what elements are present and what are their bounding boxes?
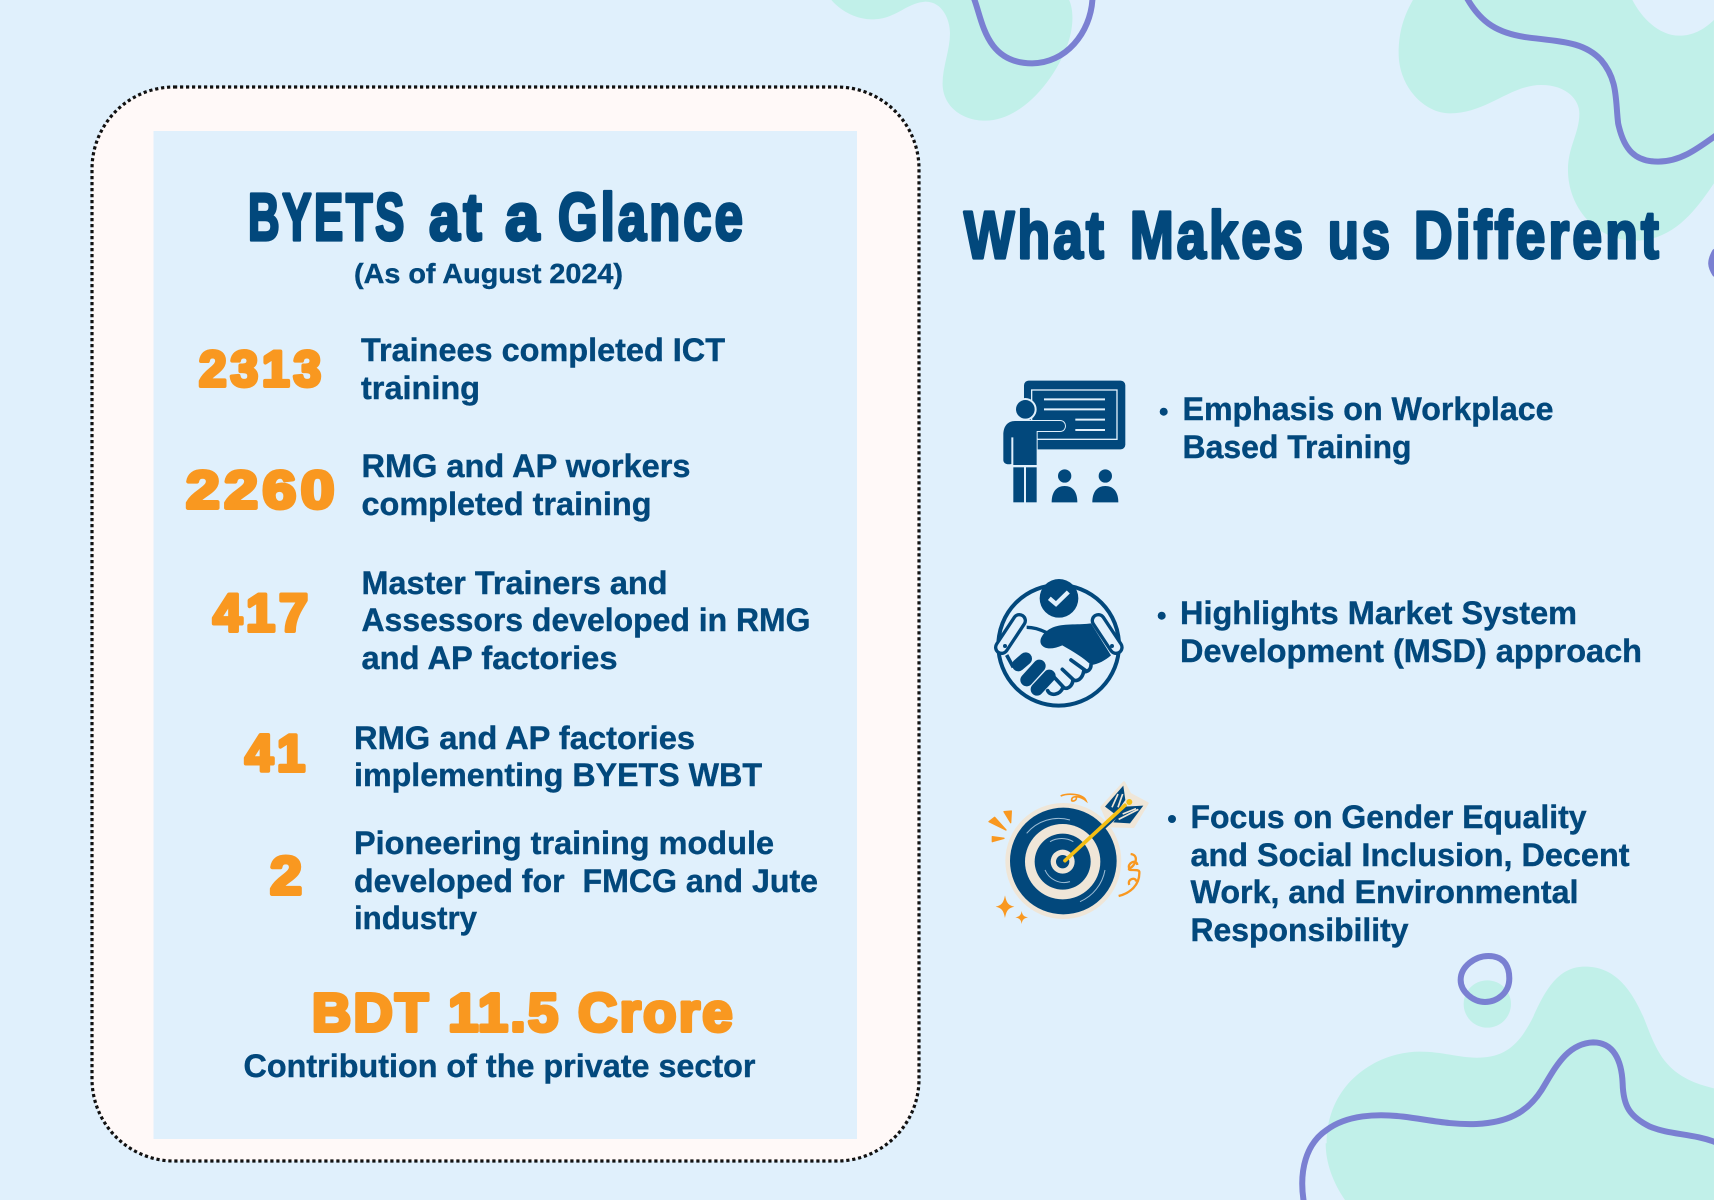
stat: BDT 11.5 Crore private sector contribution — [244, 983, 756, 1084]
stat: 417 master trainers — [213, 565, 810, 676]
stat: BDT 11.5 Crore private sector contribution: Contribution of the private sector — [244, 1048, 756, 1084]
stat: 2313 trainees — [199, 332, 725, 406]
stat: 41 factories: 41 — [245, 725, 309, 783]
stat: 2313 trainees: Trainees completed ICT — [361, 332, 725, 368]
stat: 417 master trainers: 417 — [213, 584, 312, 643]
stat: 2 pioneering modules: Pioneering training module — [354, 825, 774, 861]
icon: target with arrow — [989, 783, 1147, 924]
bullet text: and Social Inclusion, Decent — [1190, 837, 1630, 873]
panel frame: dotted rounded card — [92, 87, 919, 1161]
stat: 2260 workers: completed training — [362, 486, 652, 522]
bullet text: Focus on Gender Equality — [1190, 799, 1587, 835]
heading: BYETS at a Glance: a — [505, 180, 543, 255]
decoration: bottom right blob, ring and wavy line — [1302, 956, 1714, 1200]
bullet text — [1158, 595, 1642, 669]
icon: presenter at board with audience — [1003, 381, 1125, 502]
stat: 2 pioneering modules — [270, 825, 818, 936]
stat: 2260 workers: 2260 — [186, 461, 339, 520]
heading: What Makes us Different: Makes — [1130, 198, 1306, 273]
stat: 2260 workers: RMG and AP workers — [362, 448, 690, 484]
heading: What Makes us Different — [964, 198, 1662, 273]
decoration: top blobs and wavy lines — [831, 0, 1714, 274]
heading: What Makes us Different: What — [964, 198, 1107, 273]
stat: 2 pioneering modules: industry — [354, 900, 477, 936]
bullet text: Highlights Market System — [1180, 595, 1577, 631]
heading: BYETS at a Glance — [248, 180, 746, 255]
stat: 2260 workers — [186, 448, 690, 522]
panel inner background — [154, 131, 857, 1139]
heading: BYETS at a Glance: Glance — [558, 180, 746, 255]
bullet text: Based Training — [1182, 429, 1412, 465]
bullet text: Work, and Environmental — [1190, 874, 1578, 910]
stat: 2313 trainees: 2313 — [199, 341, 325, 397]
item: workplace based training — [1003, 381, 1554, 502]
bullet text: Development (MSD) approach — [1180, 633, 1642, 669]
heading: BYETS at a Glance: at — [429, 180, 485, 255]
stat: 417 master trainers: Assessors developed in RMG — [362, 602, 810, 638]
stat: BDT 11.5 Crore private sector contribution: BDT 11.5 Crore — [312, 983, 735, 1043]
icon: handshake in circle with check — [998, 579, 1119, 706]
bullet text: Responsibility — [1190, 912, 1409, 948]
stat: 41 factories — [245, 720, 762, 793]
stat: 41 factories: implementing BYETS WBT — [354, 757, 762, 793]
item: gender equality and inclusion — [989, 783, 1630, 948]
stat: 417 master trainers: and AP factories — [362, 640, 618, 676]
stat: 2 pioneering modules: developed for FMCG and Jute — [354, 863, 818, 899]
heading: What Makes us Different: us — [1328, 198, 1393, 273]
subheading: as of date: (As of August 2024) — [354, 258, 623, 289]
item: market system development — [998, 579, 1642, 706]
stat: 2313 trainees: training — [361, 370, 480, 406]
bullet text — [1168, 799, 1630, 948]
stat: 417 master trainers: Master Trainers and — [362, 565, 668, 601]
bullet text — [1160, 391, 1554, 465]
stat: 41 factories: RMG and AP factories — [354, 720, 695, 756]
panel: BYETS at a Glance — [92, 87, 919, 1161]
heading: BYETS at a Glance: BYETS — [248, 180, 407, 255]
stat: 2 pioneering modules: 2 — [270, 846, 302, 906]
bullet text: Emphasis on Workplace — [1182, 391, 1554, 427]
